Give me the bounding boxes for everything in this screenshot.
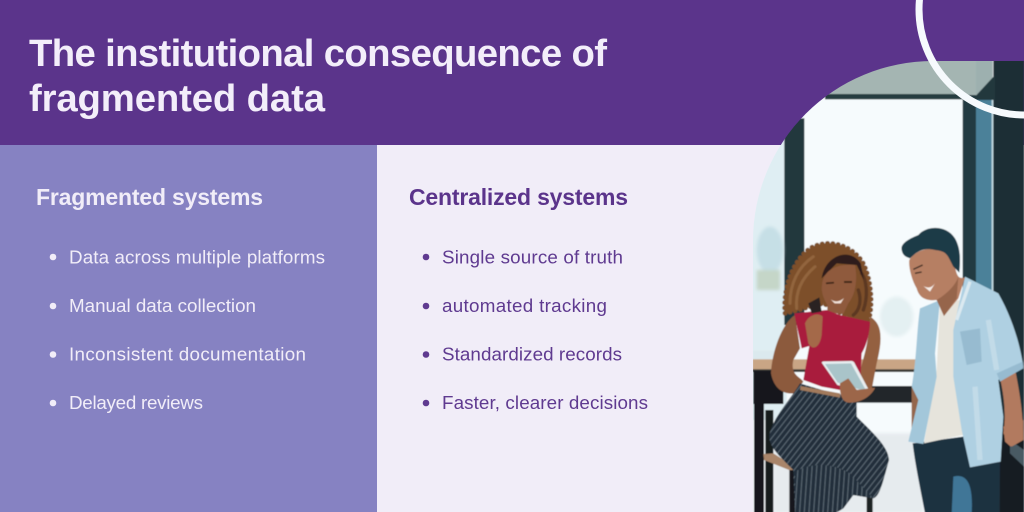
- hair back, curly: [785, 243, 871, 322]
- heading: centralized systems: Centralized systems: [409, 184, 628, 210]
- list: fragmented items: Manual data collection: [69, 295, 256, 316]
- neck and face: [909, 249, 965, 316]
- list: centralized items: automated tracking: [442, 295, 607, 316]
- list: centralized items: Standardized records: [442, 344, 622, 364]
- list: centralized items: Faster, clearer decisions: [442, 392, 648, 413]
- list: fragmented items: [50, 246, 325, 413]
- decorative white ring: [919, 0, 1024, 115]
- arms: [771, 315, 803, 394]
- face and neck: [822, 265, 856, 314]
- title: [29, 32, 607, 120]
- photo background: window frame: [740, 60, 1024, 512]
- photo: two colleagues looking at a tablet: [740, 60, 1024, 512]
- hand: [1003, 420, 1023, 447]
- list: fragmented items: Inconsistent documentation: [69, 344, 306, 364]
- panel: fragmented systems: [0, 145, 377, 512]
- heading: fragmented systems: Fragmented systems: [36, 184, 263, 210]
- people and furniture: [753, 228, 1024, 512]
- belt: [800, 386, 840, 398]
- dark jeans: [913, 437, 1000, 512]
- title: The institutional consequence of: [29, 32, 607, 75]
- list: centralized items: Single source of truth: [442, 246, 623, 268]
- list: fragmented items: Data across multiple platforms: [69, 246, 325, 268]
- striped trousers: [769, 383, 889, 512]
- tablet: [822, 361, 871, 393]
- blurred outdoors at left: [757, 227, 923, 512]
- hair: [901, 228, 960, 273]
- woman: [769, 243, 889, 512]
- white t-shirt: [924, 300, 963, 444]
- title: fragmented data: [29, 77, 326, 120]
- man: [901, 228, 1023, 512]
- panel: centralized systems: [409, 184, 648, 413]
- denim shirt left: [908, 300, 940, 444]
- header band: [0, 0, 1024, 145]
- list: fragmented items: Delayed reviews: [69, 392, 203, 413]
- red top: [794, 310, 870, 390]
- hand on tablet: [840, 378, 875, 403]
- denim shirt right: [953, 277, 1023, 467]
- background panel: centralized side: [377, 145, 1024, 512]
- list: centralized items: [423, 246, 648, 413]
- counter and stool: [753, 351, 1024, 512]
- arm: [998, 368, 1023, 447]
